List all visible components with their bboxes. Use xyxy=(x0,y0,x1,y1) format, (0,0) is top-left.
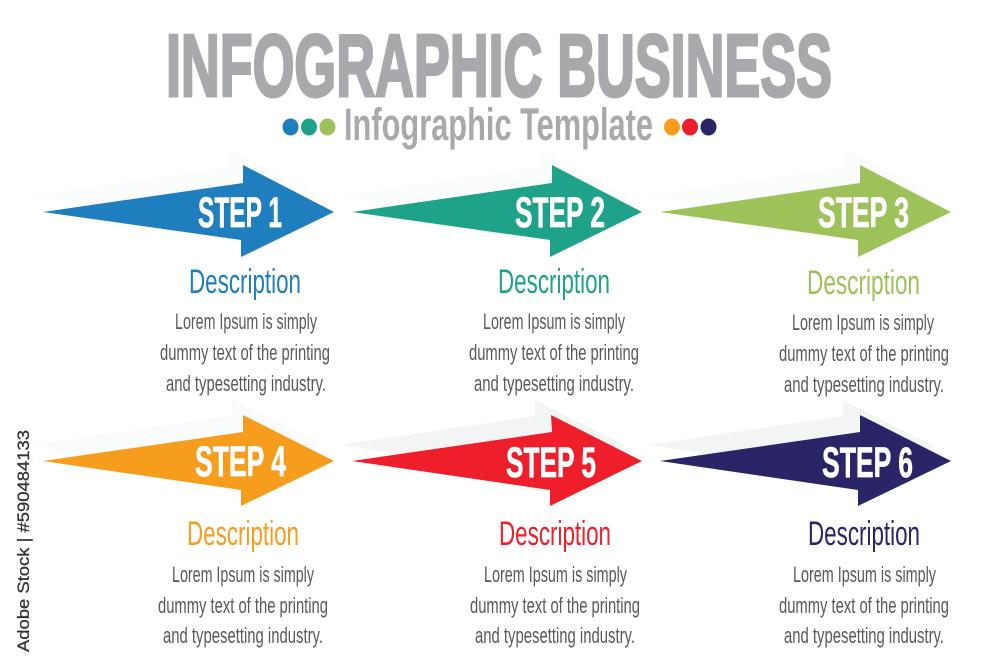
step 5 text xyxy=(470,562,640,648)
panel: step 6 xyxy=(648,400,951,648)
step 5 text: and typesetting industry. xyxy=(475,623,635,648)
step 6 heading: Description xyxy=(808,515,920,553)
step 4 text: dummy text of the printing xyxy=(158,593,328,618)
panel: step 4 xyxy=(31,398,334,648)
step 3 text xyxy=(779,310,949,397)
step 2 text: Lorem Ipsum is simply xyxy=(483,309,625,334)
arrow: step 6 xyxy=(660,415,951,506)
step 2 text: and typesetting industry. xyxy=(474,371,634,396)
step 5 label: STEP 5 xyxy=(506,439,596,487)
step 2 label: STEP 2 xyxy=(515,189,605,237)
step 4 text: Lorem Ipsum is simply xyxy=(172,562,314,587)
arrow: step 4 xyxy=(43,415,334,506)
arrow: step 5 shadow xyxy=(340,400,626,491)
step 6 text xyxy=(779,562,949,648)
arrow: step 4 shadow xyxy=(31,398,322,490)
arrow: step 1 shadow xyxy=(29,149,320,241)
step 1 heading: Description xyxy=(189,263,301,301)
step 1 text: and typesetting industry. xyxy=(166,371,326,396)
step 4 heading: Description xyxy=(187,515,299,553)
step 5 text: Lorem Ipsum is simply xyxy=(484,562,627,587)
icon: left colored dots xyxy=(282,118,336,136)
arrow: step 2 xyxy=(352,165,642,257)
step 1 text xyxy=(160,309,330,396)
step 1 text: dummy text of the printing xyxy=(160,340,330,365)
arrow: step 3 shadow xyxy=(646,149,937,241)
step 5 text: dummy text of the printing xyxy=(470,593,640,618)
step 4 label: STEP 4 xyxy=(195,438,286,486)
step 6 label: STEP 6 xyxy=(822,439,913,487)
panel: step 5 xyxy=(340,400,642,648)
step 5 heading: Description xyxy=(499,515,611,553)
panel: step 2 xyxy=(338,149,642,396)
arrow: step 6 shadow xyxy=(648,400,934,491)
step 1 text: Lorem Ipsum is simply xyxy=(175,309,317,334)
step 1 label: STEP 1 xyxy=(198,189,282,237)
step 2 text xyxy=(469,309,639,396)
arrow: step 5 xyxy=(352,415,642,506)
step 4 text xyxy=(158,562,328,648)
arrow: step 1 xyxy=(43,165,334,257)
step 2 heading: Description xyxy=(498,263,610,301)
subtitle: Infographic Template xyxy=(344,99,653,150)
step 3 label: STEP 3 xyxy=(818,189,909,237)
panel: step 3 xyxy=(646,149,951,397)
icon: right colored dots xyxy=(664,118,716,136)
arrow: step 3 xyxy=(660,165,951,257)
panel: step 1 xyxy=(29,149,334,396)
step 4 text: and typesetting industry. xyxy=(163,623,323,648)
step 2 text: dummy text of the printing xyxy=(469,340,639,365)
side credit text: Adobe Stock | #590484133 xyxy=(14,430,33,652)
step 3 heading: Description xyxy=(807,264,920,302)
arrow: step 2 shadow xyxy=(338,149,629,241)
